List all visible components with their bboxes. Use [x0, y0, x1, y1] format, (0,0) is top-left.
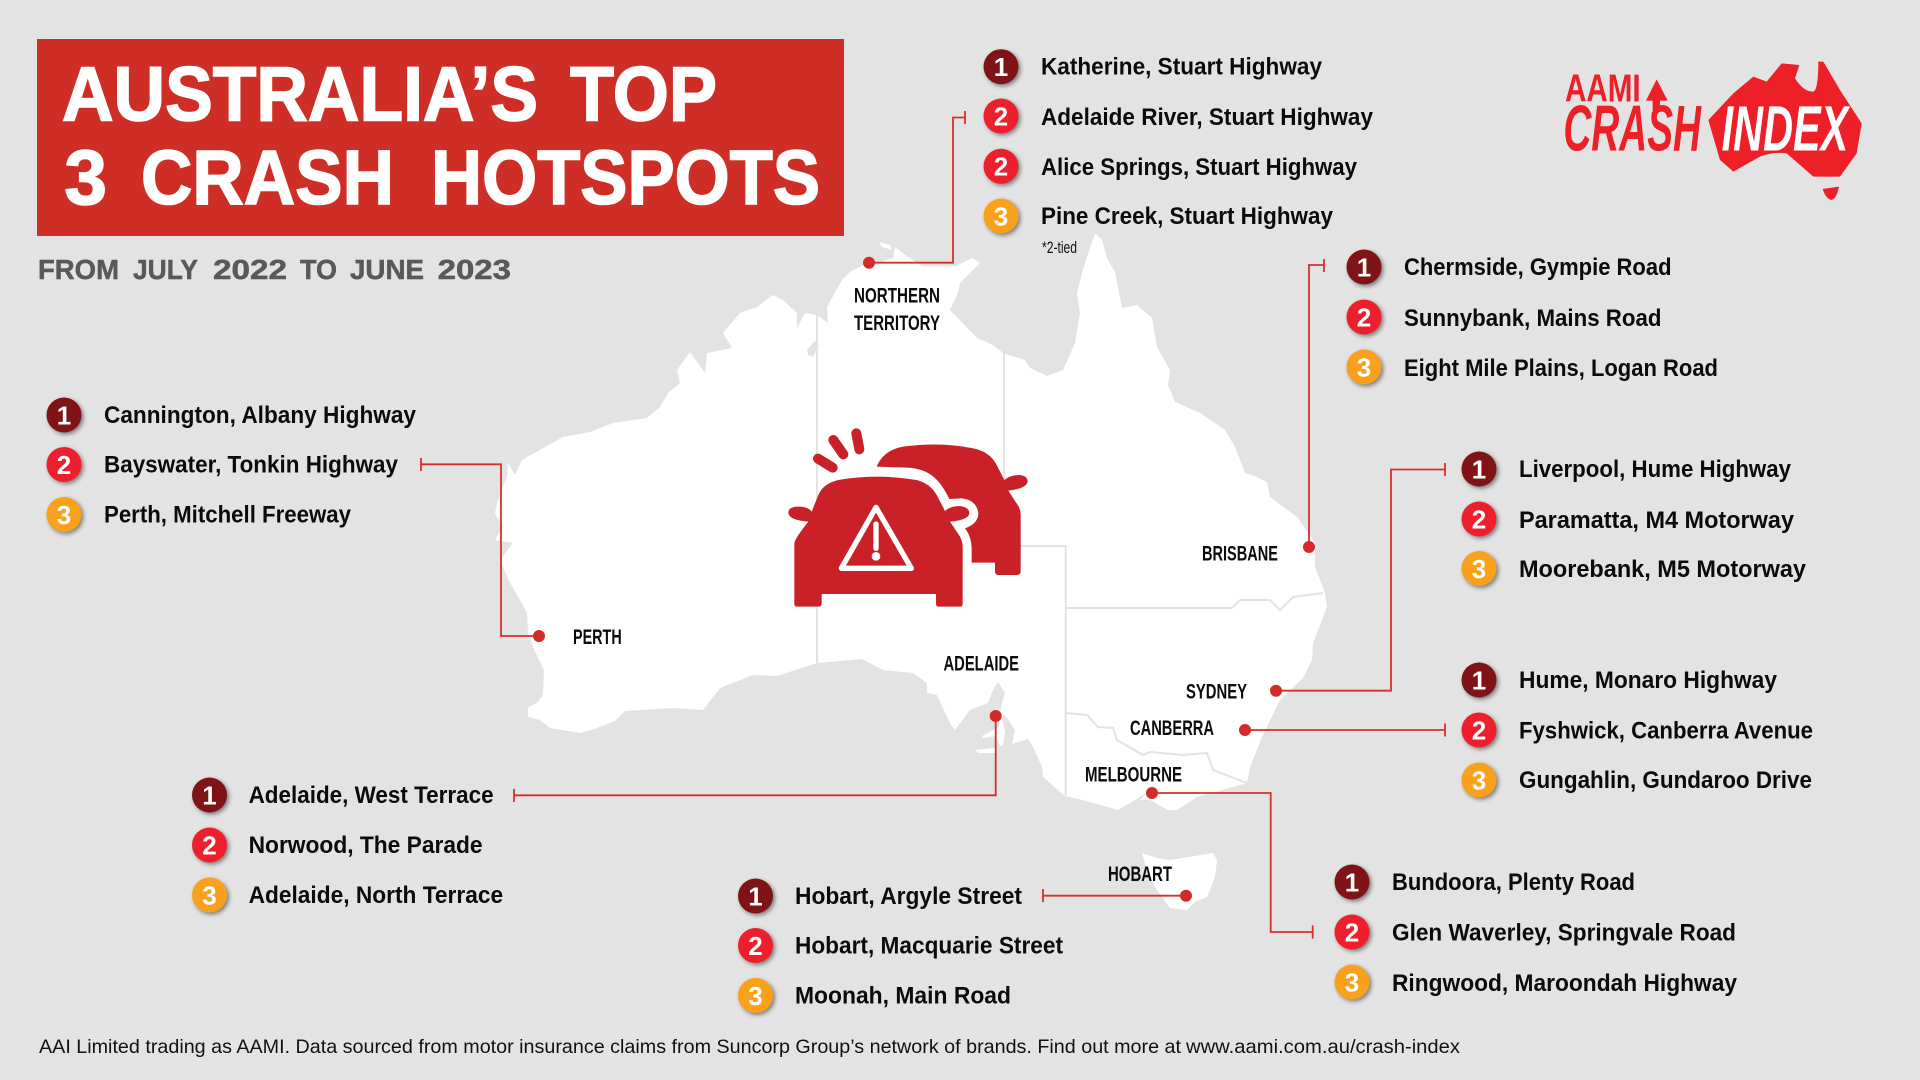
subtitle: 2023	[438, 254, 511, 285]
item: Pine Creek: Pine Creek, Stuart Highway	[1041, 203, 1333, 230]
item: Mitchell Freeway: 3	[57, 500, 71, 530]
list: Canberra	[1462, 662, 1813, 798]
title text	[62, 52, 820, 221]
rear car	[877, 445, 1028, 575]
item: Katherine: 1	[994, 52, 1008, 82]
item: Bundoora: 1	[1345, 867, 1359, 897]
item: Ringwood: 3	[1345, 967, 1359, 997]
label: Brisbane: BRISBANE	[1202, 543, 1278, 566]
logo INDEX: INDEX	[1722, 93, 1850, 165]
leader: Hobart	[1043, 889, 1192, 902]
footer source note: AAI Limited trading as AAMI. Data sourced from motor insurance claims from Suncorp Group’s network of brands. Find out more at	[39, 1036, 1182, 1058]
title text: CRASH	[141, 135, 394, 221]
item: Ringwood: Ringwood, Maroondah Highway	[1392, 970, 1737, 997]
item: Liverpool: Liverpool, Hume Highway	[1519, 456, 1791, 483]
front car	[788, 477, 969, 607]
item: The Parade: Norwood, The Parade	[249, 832, 483, 859]
item: Hume	[1462, 662, 1777, 698]
item: Bayswater: Bayswater, Tonkin Highway	[104, 452, 398, 478]
item: Alice Springs: 2	[994, 152, 1008, 182]
item: Glen Waverley	[1334, 914, 1736, 950]
item: Paramatta: Paramatta, M4 Motorway	[1519, 507, 1794, 534]
item: Bundoora: Bundoora, Plenty Road	[1392, 869, 1635, 896]
list: Perth	[46, 398, 416, 532]
title text: 3	[64, 135, 107, 221]
logo arrow	[1646, 79, 1668, 110]
item: Moonah	[738, 978, 1011, 1013]
Tiwi Islands	[879, 242, 892, 250]
item: Fyshwick: 2	[1472, 715, 1486, 745]
label: Northern Territory	[854, 285, 940, 335]
item: Cannington: 1	[57, 400, 71, 430]
state borders	[817, 315, 1323, 795]
leader: Perth	[421, 458, 545, 642]
item: Bundoora	[1334, 864, 1635, 900]
item: Gungahlin: 3	[1472, 765, 1486, 795]
subtitle: JULY	[133, 254, 198, 285]
subtitle: TO	[300, 254, 337, 285]
label: Melbourne: MELBOURNE	[1085, 764, 1182, 787]
title text: HOTSPOTS	[431, 135, 820, 221]
item: The Parade	[192, 828, 483, 862]
item: North Terrace	[192, 878, 503, 912]
title banner	[37, 39, 844, 236]
item: Eight Mile Plains	[1346, 350, 1718, 384]
item: Cannington	[46, 398, 416, 432]
label: Hobart: HOBART	[1108, 863, 1172, 886]
title text: TOP	[570, 52, 717, 138]
item: Eight Mile Plains: 3	[1357, 352, 1371, 382]
item: North Terrace: 3	[202, 880, 217, 910]
item: West Terrace: 1	[202, 780, 217, 810]
item: Chermside	[1346, 250, 1672, 284]
item: North Terrace: Adelaide, North Terrace	[249, 882, 503, 909]
item: Macquarie Street: 2	[748, 931, 763, 961]
item: Bayswater: 2	[57, 450, 71, 480]
item: Alice Springs	[984, 149, 1357, 184]
item: West Terrace: Adelaide, West Terrace	[249, 782, 494, 809]
item: Katherine	[984, 49, 1322, 84]
item: Hume: Hume, Monaro Highway	[1519, 667, 1777, 694]
warning triangle	[841, 507, 911, 568]
item: Macquarie Street	[738, 928, 1063, 963]
item: Sunnybank: 2	[1357, 302, 1371, 332]
item: Argyle Street: Hobart, Argyle Street	[795, 883, 1022, 910]
label: Northern Territory: TERRITORY	[854, 312, 940, 335]
item: Pine Creek	[984, 198, 1333, 234]
item: Gungahlin	[1462, 762, 1812, 798]
item: Mitchell Freeway	[46, 497, 351, 532]
leader: Canberra	[1239, 724, 1445, 736]
map: Australia	[495, 233, 1327, 910]
logo AAMI: AAMI	[1565, 68, 1641, 111]
Kangaroo Island	[975, 748, 995, 753]
item: The Parade: 2	[202, 830, 217, 860]
item: Argyle Street	[738, 878, 1022, 914]
item: Moonah: Moonah, Main Road	[795, 982, 1011, 1010]
label: Canberra: CANBERRA	[1130, 717, 1214, 740]
item: Fyshwick: Fyshwick, Canberra Avenue	[1519, 718, 1813, 744]
item: Bayswater	[46, 447, 398, 482]
icon: crashed cars	[788, 433, 1028, 607]
item: Chermside: Chermside, Gympie Road	[1404, 254, 1672, 281]
label: Adelaide: ADELAIDE	[944, 653, 1019, 676]
item: Liverpool	[1462, 452, 1791, 486]
logo CRASH: CRASH	[1563, 92, 1702, 165]
footnote: *2-tied	[1042, 238, 1077, 257]
item: Macquarie Street: Hobart, Macquarie Street	[795, 932, 1063, 960]
item: Chermside: 1	[1357, 252, 1371, 282]
footer source note: www.aami.com.au/crash-index	[1185, 1036, 1460, 1058]
subtitle: FROM	[38, 254, 119, 285]
item: Sunnybank	[1346, 300, 1662, 334]
item: Glen Waverley: 2	[1345, 917, 1359, 947]
item: Adelaide River: 2	[994, 101, 1008, 131]
subtitle	[38, 254, 511, 285]
item: Sunnybank: Sunnybank, Mains Road	[1404, 305, 1662, 332]
list: Adelaide	[192, 778, 503, 912]
city labels	[573, 285, 1278, 886]
label: Northern Territory: NORTHERN	[854, 285, 940, 308]
logo Australia shape	[1708, 62, 1862, 177]
item: Ringwood	[1334, 964, 1737, 1000]
item: Glen Waverley: Glen Waverley, Springvale Road	[1392, 920, 1736, 947]
item: Moorebank: Moorebank, M5 Motorway	[1519, 556, 1806, 583]
Tasmania	[1142, 853, 1217, 910]
item: Moorebank: 3	[1472, 554, 1486, 584]
list: Hobart	[738, 878, 1063, 1013]
item: Adelaide River: Adelaide River, Stuart Highway	[1041, 104, 1373, 131]
list: Queensland	[1346, 250, 1718, 384]
item: Paramatta: 2	[1472, 504, 1486, 534]
leader: Northern Territory	[863, 111, 965, 269]
item: Fyshwick	[1462, 712, 1813, 748]
item: Cannington: Cannington, Albany Highway	[104, 402, 416, 429]
impact marks	[818, 433, 859, 468]
Joseph Bonaparte inlet	[807, 341, 819, 357]
item: Alice Springs: Alice Springs, Stuart Highway	[1041, 154, 1357, 181]
item: Paramatta	[1462, 502, 1794, 536]
list: Sydney	[1462, 452, 1806, 586]
leader: Sydney	[1270, 463, 1445, 697]
logo: AAMI Crash Index	[1563, 62, 1862, 200]
item: Argyle Street: 1	[748, 881, 763, 911]
item: Eight Mile Plains: Eight Mile Plains, Logan Road	[1404, 355, 1718, 382]
title text: AUSTRALIA’S	[62, 52, 538, 138]
item: Liverpool: 1	[1472, 454, 1486, 484]
item: Gungahlin: Gungahlin, Gundaroo Drive	[1519, 767, 1812, 794]
label: Perth: PERTH	[573, 626, 622, 649]
item: West Terrace	[192, 778, 494, 812]
item: Adelaide River	[984, 98, 1373, 134]
item: Moorebank	[1462, 551, 1806, 586]
leader: Adelaide	[514, 710, 1002, 802]
list: Melbourne	[1334, 864, 1737, 1000]
item: Pine Creek: 3	[994, 201, 1008, 231]
logo Tasmania	[1823, 187, 1839, 200]
item: Mitchell Freeway: Perth, Mitchell Freeway	[104, 502, 351, 528]
item: Moonah: 3	[748, 981, 763, 1011]
label: Sydney: SYDNEY	[1186, 681, 1247, 704]
list: Northern Territory	[984, 49, 1373, 257]
leader: Melbourne	[1146, 787, 1313, 938]
subtitle: JUNE	[350, 254, 424, 285]
subtitle: 2022	[213, 254, 287, 285]
item: Hume: 1	[1472, 665, 1486, 695]
item: Katherine: Katherine, Stuart Highway	[1041, 54, 1322, 80]
mainland	[495, 233, 1327, 810]
leader: Brisbane	[1303, 259, 1324, 553]
